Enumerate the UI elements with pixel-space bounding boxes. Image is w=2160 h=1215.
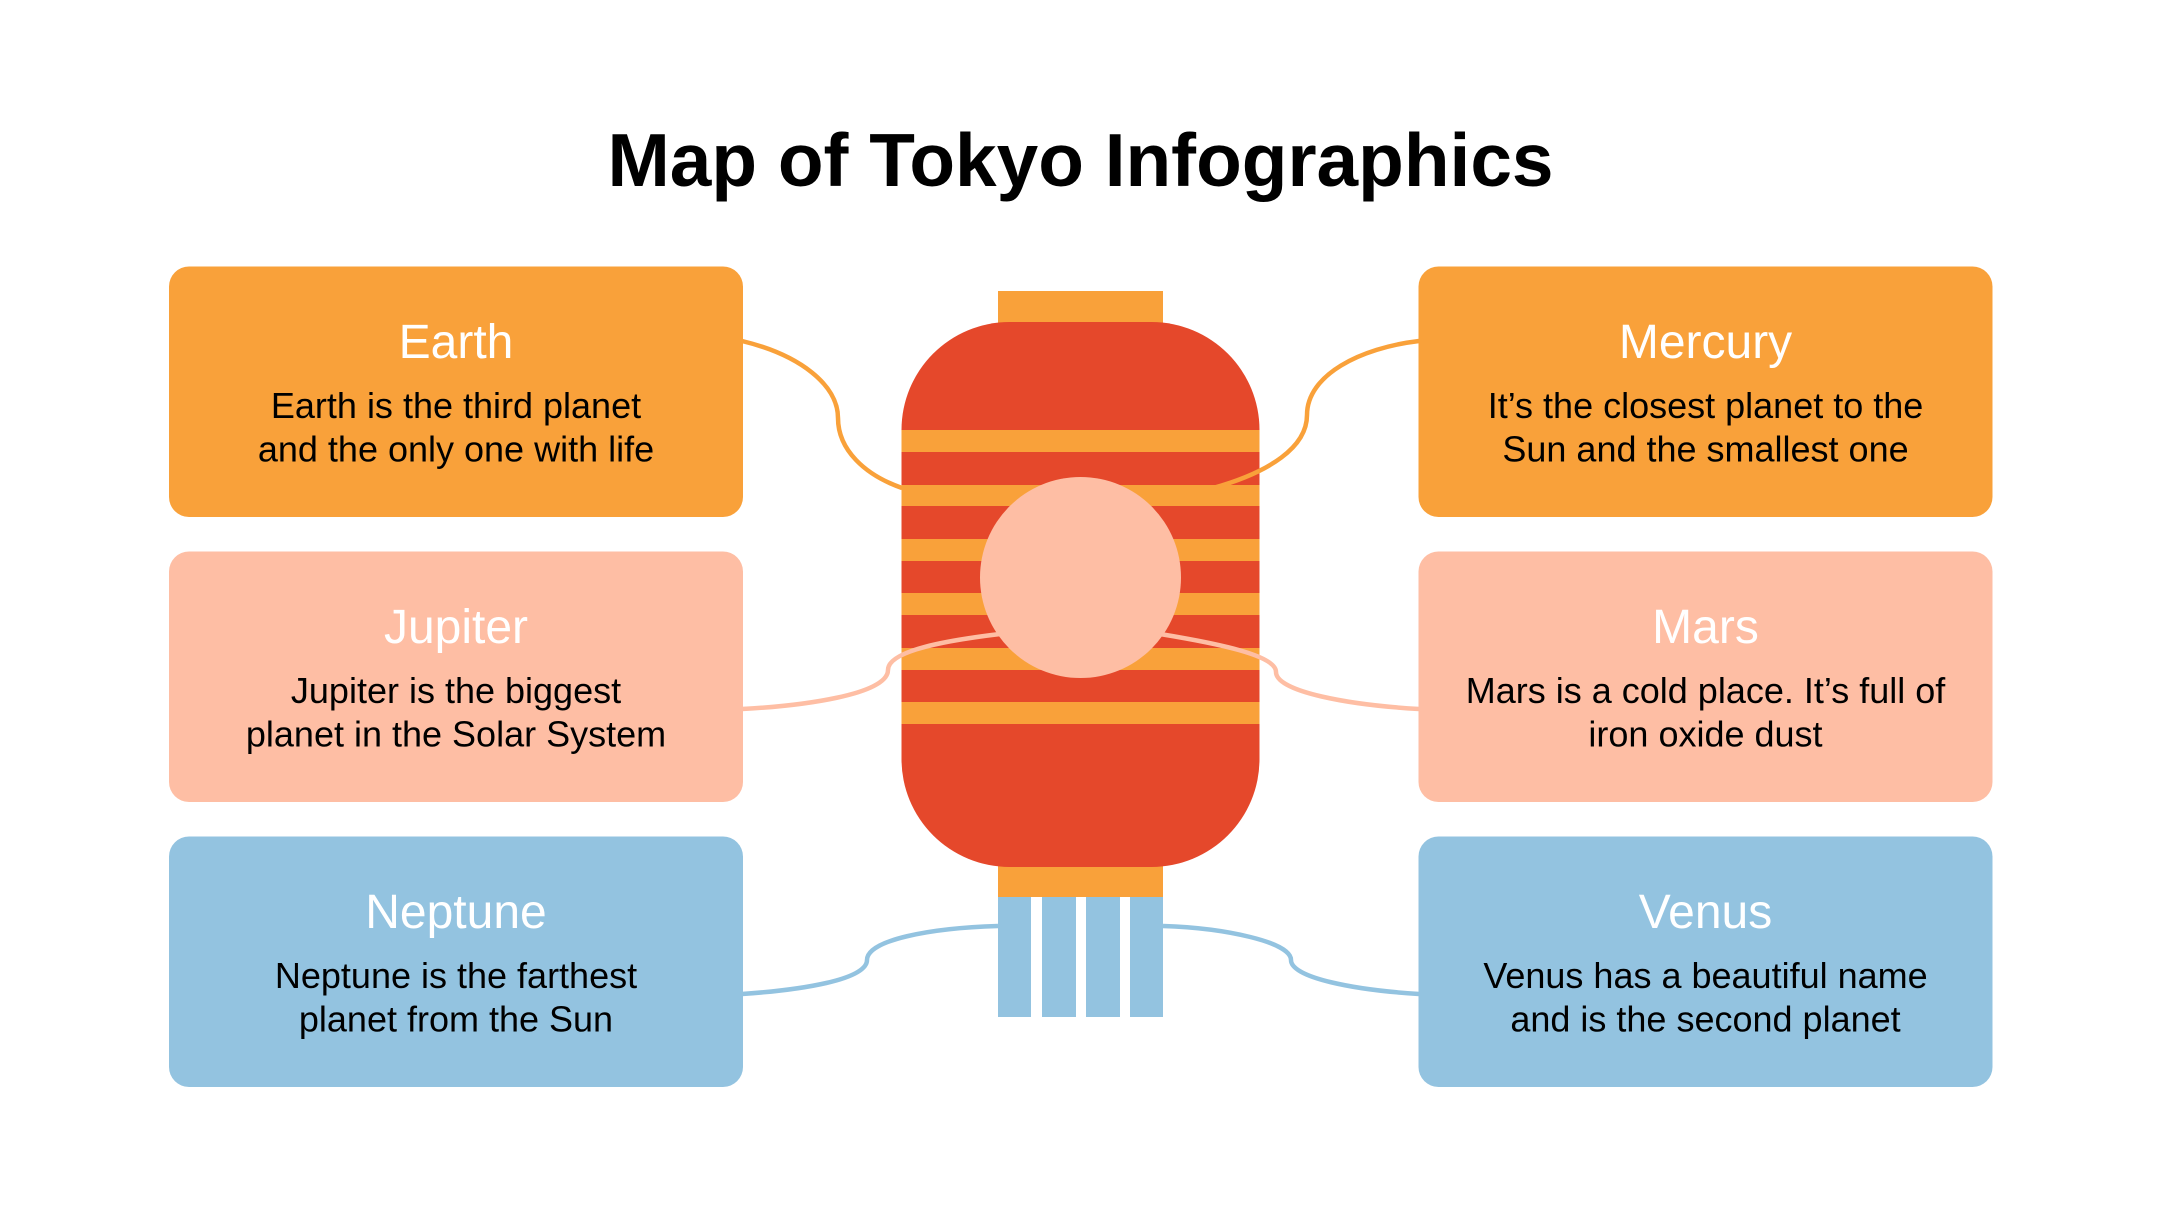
panel: Venus: Venus has a beautiful name [1483,955,1928,996]
lantern body [902,322,1260,867]
arrow: Jupiter connector [742,634,1000,709]
panel: Neptune: Neptune [365,886,547,939]
panel: Mars: Mars [1652,601,1759,654]
panel: Mercury: Mercury [1619,316,1792,369]
arrow: Earth connector [742,341,902,488]
lantern tassels [998,897,1163,1017]
panel: Earth: and the only one with life [258,428,654,470]
arrow: Neptune connector [742,926,998,994]
panel: Mars: iron oxide dust [1588,714,1823,754]
title: Map of Tokyo Infographics [607,118,1554,202]
panel: Mercury [1418,266,1992,517]
panel: Venus [1418,836,1992,1087]
panel: Mercury: Sun and the smallest one [1502,428,1909,470]
panel: Mars [1418,552,1992,802]
arrow: Mercury connector [1213,341,1419,488]
panel: Jupiter [169,552,743,802]
panel: Earth: Earth is the third planet [271,385,641,426]
panel: Neptune: Neptune is the farthest [275,955,637,996]
lantern top cap [998,291,1163,325]
panel: Venus: Venus [1639,886,1772,939]
panel: Jupiter: Jupiter [384,601,528,654]
panel: Neptune: planet from the Sun [299,998,613,1040]
panel: Neptune [169,836,743,1087]
arrow: Mars connector [1160,634,1419,709]
panel: Jupiter: Jupiter is the biggest [291,670,621,711]
panel: Venus: and is the second planet [1510,998,1901,1040]
lantern centre circle [980,477,1181,678]
panel: Jupiter: planet in the Solar System [246,714,666,754]
lantern stripes [902,430,1260,724]
panel: Earth [169,266,743,517]
panel: Mars: Mars is a cold place. It’s full of [1466,670,1946,711]
panel: Earth: Earth [399,316,513,369]
panel: Mercury: It’s the closest planet to the [1488,385,1923,426]
arrow: Venus connector [1163,926,1419,994]
lantern bottom cap [998,860,1163,897]
